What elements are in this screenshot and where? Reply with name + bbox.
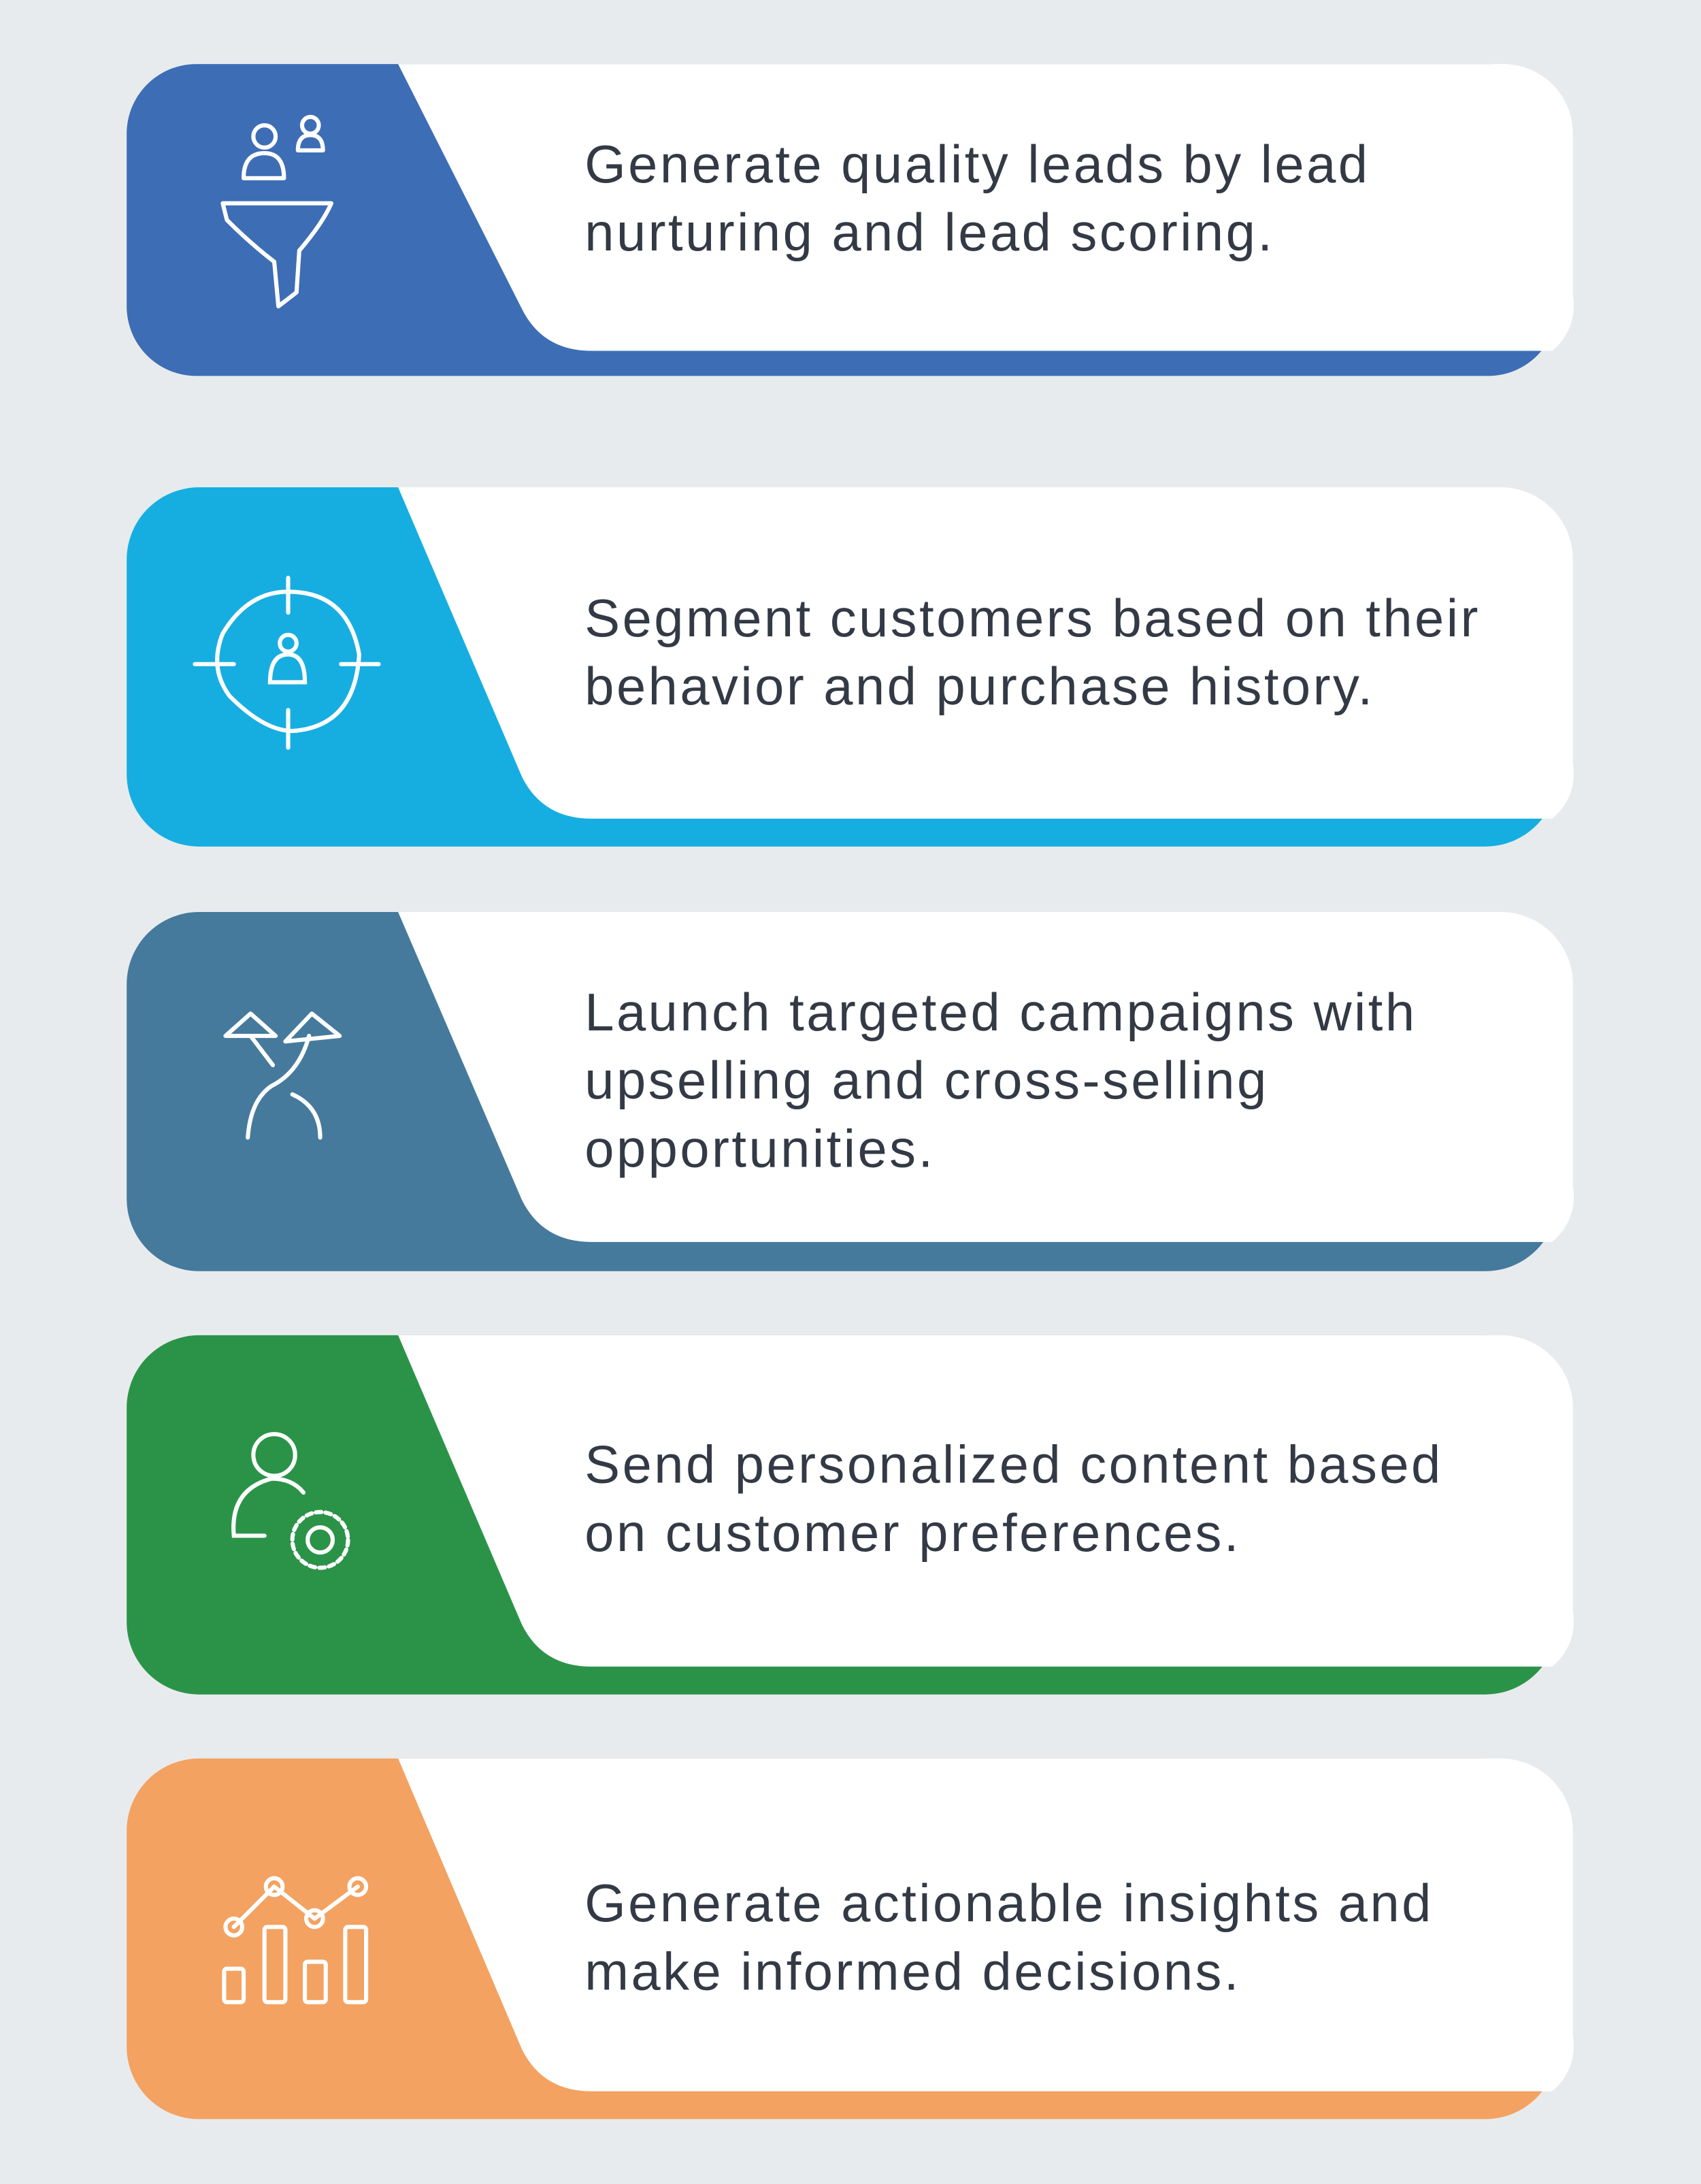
panel: card 3 campaigns — [127, 912, 1574, 1271]
panel: card 2 segmentation — [127, 487, 1574, 847]
panel: card 5 insights: make informed decisions. — [584, 1942, 1241, 2001]
text: card 1: Generate quality leads by lead — [584, 135, 1370, 194]
panel: card 4 personalized content — [127, 1335, 1574, 1695]
panel: card 4 personalized content: on customer preferences. — [584, 1504, 1241, 1563]
icon: crossing arrows — [225, 1013, 340, 1137]
panel: card 1 lead generation: nurturing and lead scoring. — [584, 203, 1274, 262]
panel: card 3 campaigns: opportunities. — [584, 1120, 936, 1178]
panel: card 1 lead generation — [127, 64, 1574, 376]
panel: card 5 insights — [127, 1759, 1574, 2119]
icon: target with person — [195, 578, 378, 748]
text: card 5: Generate actionable insights and — [584, 1874, 1434, 1933]
icon: person with gear — [233, 1434, 348, 1568]
panel: card 3 campaigns: upselling and cross-selling — [584, 1052, 1269, 1110]
icon: bar chart with trend line — [224, 1878, 366, 2002]
icon: people over funnel — [222, 117, 331, 306]
text: card 2: Segment customers based on their — [584, 589, 1481, 648]
text: card 3: Launch targeted campaigns with — [584, 983, 1417, 1042]
text: card 4: Send personalized content based — [584, 1436, 1443, 1495]
panel: card 2 segmentation: behavior and purchase history. — [584, 657, 1375, 716]
